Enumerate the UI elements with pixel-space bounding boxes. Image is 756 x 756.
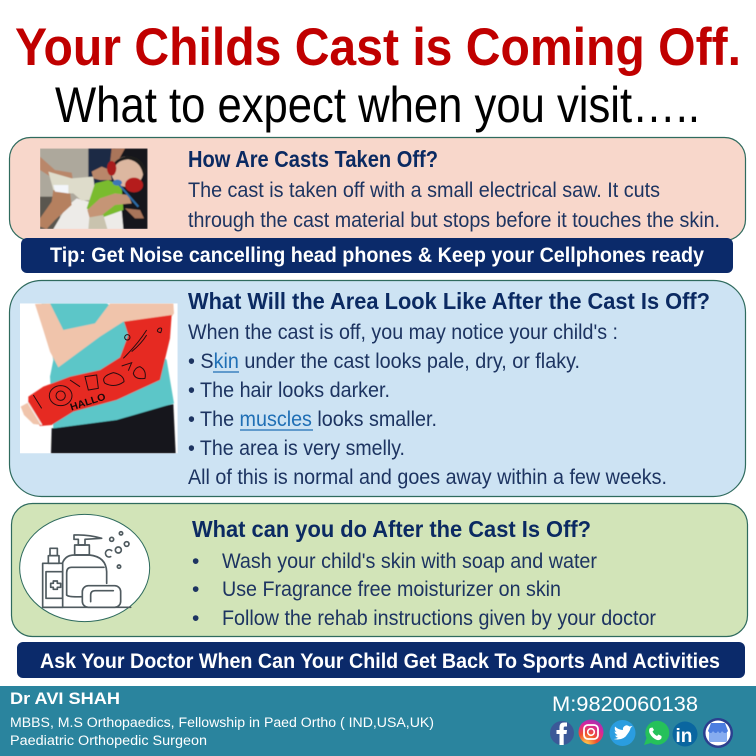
icon: soap, pump bottle and spray: [20, 514, 150, 622]
tip bar: [21, 238, 733, 273]
bullet list: [192, 550, 656, 630]
icons: social media: [550, 718, 733, 748]
heading: What Will the Area Look Like After the Cast Is Off?: [188, 288, 710, 314]
text block: • The hair looks darker.: [188, 379, 390, 402]
icons: social media: in: [676, 726, 692, 747]
bullet list: Follow the rehab instructions given by your doctor: [222, 607, 656, 630]
photo: baby with ear defenders having cast removed: [40, 148, 148, 229]
heading: What can you do After the Cast Is Off?: [192, 516, 591, 542]
text block: through the cast material but stops before it touches the skin.: [188, 209, 720, 232]
bullet list: Wash your child's skin with soap and water: [222, 550, 597, 573]
text block: When the cast is off, you may notice your child's :: [188, 321, 618, 344]
bullet list: •: [192, 607, 199, 630]
bullet list: •: [192, 550, 199, 573]
bullet list: •: [192, 578, 199, 601]
text block: The cast is taken off with a small electrical saw. It cuts: [188, 179, 660, 202]
panel: how casts are taken off: [10, 138, 746, 240]
text block: [188, 179, 720, 232]
callout bar: [17, 642, 745, 678]
doctor details: MBBS, M.S Orthopaedics, Fellowship in Paed Ortho ( IND,USA,UK): [10, 715, 434, 730]
footer: [0, 686, 756, 756]
text block: • The muscles looks smaller.: [188, 408, 437, 431]
bullet list: Use Fragrance free moisturizer on skin: [222, 578, 561, 601]
text block: • Skin under the cast looks pale, dry, or flaky.: [188, 350, 580, 373]
tip bar: Tip: Get Noise cancelling head phones & Keep your Cellphones ready: [50, 244, 704, 267]
heading: How Are Casts Taken Off?: [188, 146, 438, 172]
doctor details: Dr AVI SHAH: [10, 689, 120, 708]
photo: child with red arm cast: HALLO: [69, 392, 107, 414]
photo: child with red arm cast: [20, 303, 178, 453]
text block: [188, 321, 667, 489]
phone number: M:9820060138: [552, 693, 698, 716]
panel: what the area looks like: [10, 280, 746, 496]
text block: All of this is normal and goes away within a few weeks.: [188, 466, 667, 489]
text block: • The area is very smelly.: [188, 437, 405, 460]
doctor details: [10, 689, 434, 748]
doctor details: Paediatric Orthopedic Surgeon: [10, 733, 207, 748]
panel: what you can do: [12, 504, 748, 636]
callout bar: Ask Your Doctor When Can Your Child Get Back To Sports And Activities: [40, 650, 720, 673]
